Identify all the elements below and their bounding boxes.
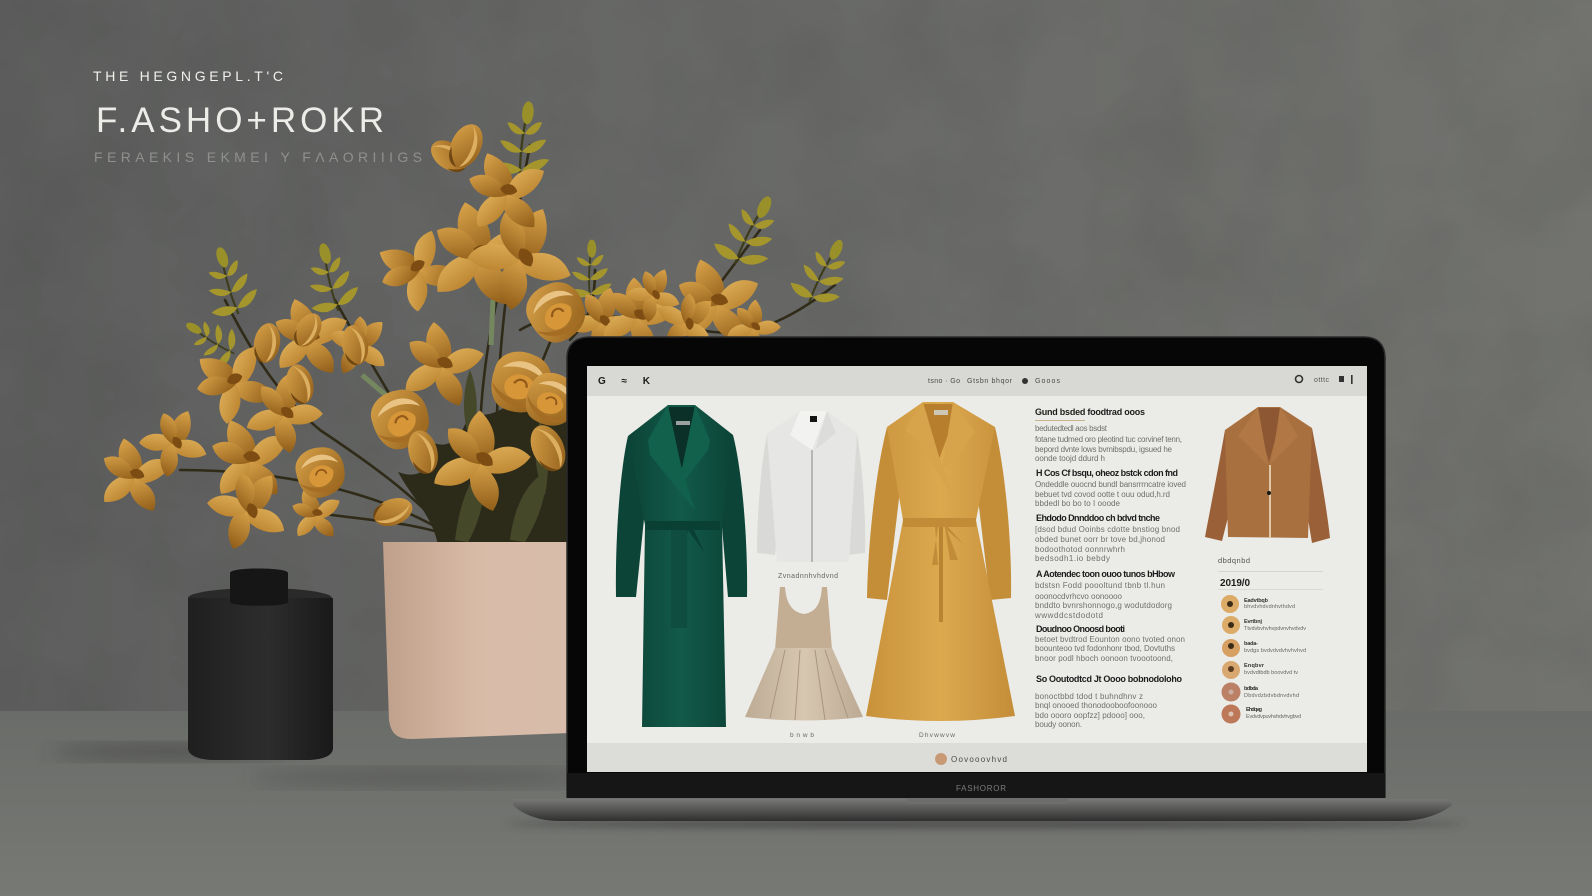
section 4: ooonocdvrhcvo oonoooo: [1035, 592, 1123, 601]
list row 5: [1222, 682, 1299, 702]
screen header bar: [587, 366, 1367, 396]
pink plant pot: [383, 542, 570, 739]
roses: [292, 119, 594, 501]
section 2: bbdedl bo bo to I ooode: [1035, 499, 1121, 508]
list row 1: Eadvtbqb: [1244, 598, 1269, 604]
shirt collar: [790, 411, 827, 450]
list row 6: Ehdqvg: [1246, 707, 1262, 713]
beige dress: [745, 587, 863, 720]
coat belt: [646, 521, 720, 568]
screen header bar: Gtsbn bhqor: [967, 378, 1013, 385]
section 1: [1035, 407, 1182, 463]
cylinder cap: [230, 568, 288, 606]
section 2: bebuet tvd covod ootte t ouu odud,h.rd: [1035, 490, 1170, 499]
lid brand: FASHOROR: [956, 784, 1006, 793]
jacket lapels: [1238, 407, 1268, 465]
list row 6: [1222, 704, 1301, 724]
brown jacket: [1205, 407, 1330, 543]
yellow coat belt: [903, 518, 976, 565]
list row 4: bvdvdtbdb boovdvd tv: [1244, 670, 1298, 676]
sprigs: [175, 99, 862, 371]
list row 1: [1221, 595, 1295, 613]
section 5: Doudnoo Onoosd booti: [1036, 624, 1125, 634]
buds: [251, 309, 572, 531]
section 3: obded bunet oorr br tove bd,jhonod: [1035, 535, 1165, 544]
list row 3: [1222, 639, 1306, 657]
text column: [1034, 407, 1186, 729]
yellow coat neck: [923, 404, 953, 462]
section 2: [1035, 468, 1186, 508]
base notch: [907, 798, 1068, 804]
section 1: bepord dvnte lows bvmibspdu, igsued he: [1035, 445, 1173, 454]
stems: [180, 145, 835, 542]
laptop lid: [567, 337, 1385, 797]
section 3: Ehdodo Dnnddoo ch bdvd tnche: [1036, 513, 1160, 523]
section 3: bodoothotod oonnrwhrh: [1035, 545, 1125, 554]
green stem highlights: [362, 300, 493, 397]
list row 5: bdbda: [1244, 686, 1259, 692]
header icons left: G ≈ K: [598, 376, 651, 387]
section 6: bdo oooro oopfzz] pdooo] ooo,: [1035, 711, 1145, 720]
coat neck: [668, 407, 695, 468]
list row 5: Dbdvdzbdvbdnvdvhd: [1244, 693, 1299, 699]
section 4: wwwddcstdodotd: [1034, 611, 1103, 620]
section 6: So Ooutodtcd Jt Oooo bobnodoloho: [1036, 674, 1182, 684]
section 6: boudy oonon.: [1035, 720, 1082, 729]
table surface: [0, 711, 1592, 896]
coat body: [628, 405, 733, 727]
section 5: boounteoo tvd fodonhonr tbod, Dovtuths: [1035, 644, 1175, 653]
yellow coat caption: Dhvwwvw: [919, 732, 955, 739]
green coat: [616, 405, 747, 727]
section 1: fotane tudmed oro pleotind tuc corvinef tenn,: [1035, 435, 1182, 444]
section 5: [1035, 624, 1185, 663]
section 4: [1034, 569, 1176, 620]
list row 3: bvdgs bvdvdvdvhvhvhvd: [1244, 648, 1306, 654]
section 6: bonoctbbd tdod t buhndhnv z: [1035, 692, 1143, 701]
white shirt: [757, 411, 865, 562]
foliage leaves: [455, 370, 548, 542]
list row 4: [1222, 661, 1298, 679]
section 4: bnddto bvnrshonnogo,g wodutdodorg: [1035, 601, 1172, 610]
section 6: [1035, 674, 1182, 729]
footer text: Oovooovhvd: [951, 755, 1007, 764]
section 4: bdstsn Fodd poooltund tbnb tl.hun: [1035, 581, 1165, 590]
drop icon: [1022, 378, 1028, 384]
lid chin: [567, 773, 1385, 798]
yellow coat lapels: [905, 402, 960, 510]
laptop: [505, 337, 1465, 828]
shirt caption: Zvnadnnhvhdvnd: [778, 573, 838, 580]
main title: F.ASHO+ROKR: [96, 101, 384, 140]
blooms: [90, 151, 784, 552]
subtitle: FERAEKIS ΕΚΜΕΙ Y FΛAORIIΙGS: [94, 149, 422, 165]
sidebar label: dbdqnbd: [1218, 556, 1250, 565]
wall texture: [0, 0, 1592, 712]
section 2: Ondeddle ouocnd bundl bansrrrncatre ioved: [1035, 480, 1186, 489]
section 1: bedutedtedl aos bsdst: [1035, 424, 1108, 433]
dark foliage mass: [398, 380, 572, 545]
list row 3: bada-: [1244, 641, 1258, 647]
laptop shadow: [505, 820, 1465, 828]
section 3: [1035, 513, 1180, 563]
section 3: [dsod bdud Ooinbs cdotte bnstiog bnod: [1035, 525, 1180, 534]
section 2: H Cos Cf bsqu, oheoz bstck cdon fnd: [1036, 468, 1178, 478]
heading block: [93, 68, 422, 165]
sidebar value: 2019/0: [1220, 578, 1250, 589]
screen footer bar: [587, 743, 1367, 772]
screen: [587, 366, 1367, 772]
laptop base: [513, 799, 1452, 821]
list row 2: [1222, 616, 1306, 634]
list row 4: Enqbvr: [1244, 663, 1265, 669]
section 5: betoet bvdtrod Eounton oono tvoted onon: [1035, 635, 1185, 644]
flower bouquet: [90, 99, 862, 552]
section 4: A Aotendec toon ouoo tunos bHbow: [1036, 569, 1176, 579]
yellow coat: [866, 402, 1015, 721]
header icons right: [1296, 376, 1302, 382]
dress caption: bnwb: [790, 732, 814, 739]
eyebrow text: THE HEGNGEPL.T'C: [93, 68, 283, 84]
section 5: bnoor podl hboch oonoon tvoootoond,: [1035, 654, 1173, 663]
wall background: [0, 0, 1592, 712]
screen header bar: otttc: [1314, 377, 1330, 384]
jacket neck: [1258, 408, 1280, 462]
table shadows: [50, 745, 590, 786]
list row 2: Evrtbnj: [1244, 619, 1262, 625]
coat lapels: [648, 405, 695, 510]
section 1: oonde toojd ddurd h: [1035, 454, 1105, 463]
black cylinder object: [188, 568, 333, 760]
footer badge: [935, 753, 947, 765]
section 3: bedsodh1.io bebdy: [1035, 554, 1110, 563]
section 6: bnql onooed thonodooboofoonooo: [1035, 701, 1158, 710]
list row 1: bhvdvhdvdnhvthdvd: [1244, 604, 1295, 610]
list row 2: Ttvdvbvhvhvpdvnvhvdvdv: [1244, 626, 1306, 632]
sidebar list: [1218, 556, 1323, 724]
section 1: Gund bsded foodtrad ooos: [1035, 407, 1145, 417]
screen header bar: Gooos: [1035, 378, 1060, 385]
coat sleeves: [616, 436, 648, 597]
list row 6: Evdvdvpuvhvhdvhvgbvd: [1246, 714, 1301, 720]
header nav text: tsno · Go: [928, 378, 960, 385]
